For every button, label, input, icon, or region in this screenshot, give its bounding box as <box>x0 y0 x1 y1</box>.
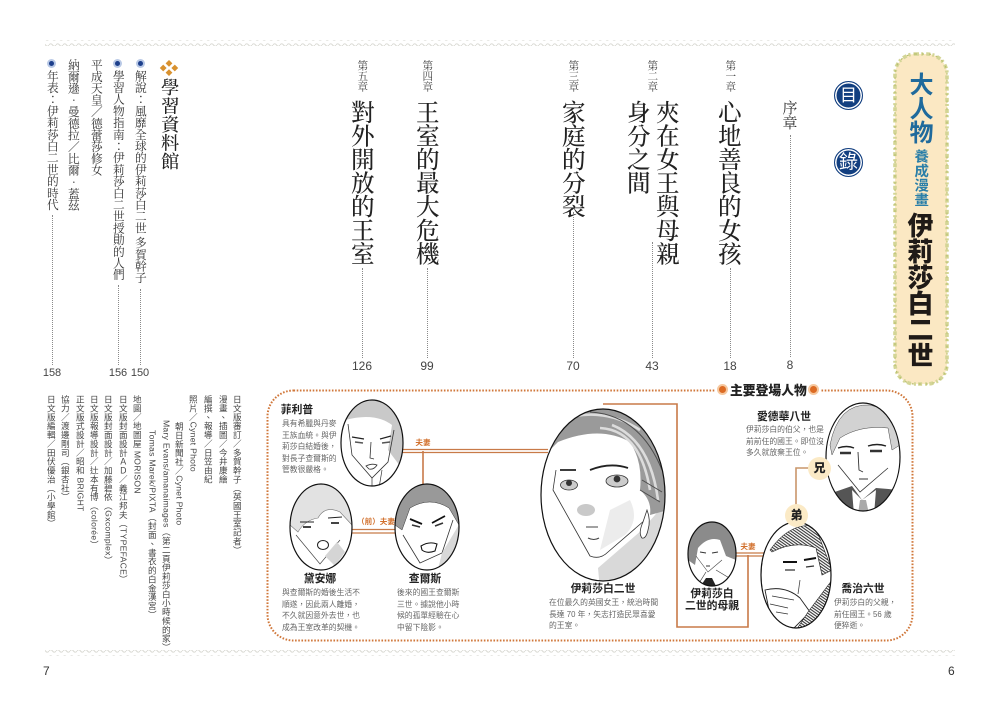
credits: 日文版報導設計／辻本有博（colorée） <box>89 395 99 549</box>
character: George VI: 喬治六世 <box>841 583 885 595</box>
character: Charles: 後來的國王查爾斯 <box>397 588 459 597</box>
page number left: 7 <box>43 664 50 678</box>
icon: contents character 目 <box>834 81 863 110</box>
credits: 地圖／地圖屋 MORISON <box>132 395 142 494</box>
character: Elizabeth II: 在位最久的英國女王，統治時間 <box>549 598 658 607</box>
character: Elizabeth's mother: 伊莉莎白 <box>690 588 734 600</box>
character: George VI: 前任國王。56 歲 <box>834 610 892 618</box>
icon: contents character 錄: 錄 <box>839 152 858 173</box>
title banner <box>893 52 949 386</box>
panel frame <box>266 390 914 642</box>
character: Edward VIII <box>746 410 824 457</box>
character: Elizabeth II: 伊莉莎白二世 <box>571 583 635 595</box>
character: Edward VIII: 前前任的國王。即位沒 <box>746 436 824 446</box>
character: Diana: 不久就因意外去世，也 <box>282 611 360 620</box>
character: Elizabeth's mother: 二世的母親 <box>685 600 739 612</box>
icon: contents character 目: 目 <box>840 86 857 105</box>
credits: 正文版式設計／昭和 BRIGHT <box>75 395 85 512</box>
portrait: Charles <box>395 484 460 570</box>
chapter 5: 126 <box>352 359 372 373</box>
icon: contents character 錄 <box>834 148 863 177</box>
people names line 1: 平成天皇／德蕾莎修女 <box>89 59 105 176</box>
character: Philip: 管教很嚴格。 <box>282 465 329 474</box>
relation label: George VI and wife: 夫妻 <box>740 542 756 551</box>
character: Diana: 順遂，因此兩人離婚， <box>282 600 360 608</box>
panel: main characters <box>266 383 914 642</box>
entry: people guide <box>109 59 127 379</box>
character: Diana: 與查爾斯的婚後生活不 <box>282 588 360 597</box>
chapter 2: 夾在女王與母親 <box>651 100 685 265</box>
character: Elizabeth II: 的王室。 <box>549 621 580 630</box>
entry: timeline: 158 <box>43 367 61 379</box>
people names line 2: 納爾遜．曼德拉／比爾．蓋茲 <box>66 59 82 211</box>
character: Philip: 王族血統。與伊 <box>282 430 337 440</box>
entry: people guide: 學習人物指南：伊莉莎白二世授勛的人們 <box>111 70 127 281</box>
chapter 3: 第三章 <box>566 60 581 92</box>
chapter 2: 43 <box>645 359 659 373</box>
panel heading: 主要登場人物 <box>730 383 807 398</box>
prologue entry: 8 <box>787 358 793 372</box>
credits: 照片／Cynet Photo <box>188 395 198 472</box>
character: Philip: 對長子查爾斯的 <box>282 454 337 462</box>
character: George VI: 伊莉莎白的父親， <box>834 598 896 607</box>
entry: commentary: 150 <box>131 367 149 379</box>
character: Philip: 菲利普 <box>281 404 313 416</box>
credits: Mary Evans/amanaimages（第二頁伊莉莎白小時候的家） <box>161 420 171 652</box>
icon: orange diamonds <box>160 60 178 76</box>
character: Edward VIII: 多久就放棄王位。 <box>746 448 808 457</box>
badge: younger brother: 弟 <box>790 508 802 522</box>
character: Charles <box>397 572 460 632</box>
character: Diana: 成為王室改革的契機。 <box>282 622 360 632</box>
entry: people guide: 156 <box>109 367 127 379</box>
chapter 2 <box>622 60 685 373</box>
chapter 1: 第一章 <box>723 60 738 92</box>
series subtitle: 養成漫畫 <box>911 149 932 207</box>
panel heading <box>715 383 821 399</box>
page number right: 6 <box>948 664 955 678</box>
portrait: Philip <box>341 400 403 488</box>
character: Philip <box>281 404 337 474</box>
relationship connectors <box>352 403 808 628</box>
entry: commentary: 解說：風靡全球的伊莉莎白二世 多賀幹子 <box>133 70 149 284</box>
credits <box>46 395 242 652</box>
portrait: Diana <box>290 484 352 570</box>
portraits <box>289 399 901 629</box>
character: Charles: 三世。據說他小時 <box>397 600 459 608</box>
series name: 大人物 <box>904 72 939 144</box>
section heading: 學習資料館 <box>157 78 183 170</box>
credits: 日文版審訂／多賀幹子（英國王室記者） <box>232 395 242 555</box>
character: Philip: 具有希臘與丹麥 <box>282 419 337 428</box>
chapter 5: 對外開放的王室 <box>346 100 380 265</box>
credits: Tomas Marek/PIXTA（封面、書衣的白金漢宮） <box>147 430 157 619</box>
chapter 2: 身分之間 <box>622 100 656 194</box>
portrait: Elizabeth's mother <box>688 520 736 590</box>
credits: 協力／渡邊剛司（銀杏社） <box>60 395 70 501</box>
character: Elizabeth's mother <box>685 588 739 612</box>
chapter 1: 18 <box>723 359 737 373</box>
portrait: Elizabeth II <box>540 400 668 590</box>
chapter 1 <box>713 60 747 373</box>
chapter 2: 第二章 <box>645 60 660 92</box>
prologue entry <box>780 100 800 372</box>
chapter 3: 家庭的分裂 <box>557 100 591 218</box>
credits: 朝日新聞社／Cynet Photo <box>174 422 184 526</box>
learning resources section <box>43 59 183 379</box>
character: Diana: 黛安娜 <box>304 573 336 585</box>
character: Edward VIII: 愛德華八世 <box>757 411 811 423</box>
chapter 5: 第五章 <box>355 60 370 92</box>
character: Diana <box>282 572 360 632</box>
credits: 日文版編輯／田伏優治（小學館） <box>46 395 56 528</box>
character: Charles: 候的孤單經驗在心 <box>397 611 459 620</box>
credits: 日文版封面設計ＡＤ／義江邦夫（TYPEFACE） <box>118 395 128 584</box>
book title: 伊莉莎白二世 <box>902 212 939 368</box>
character: Charles: 查爾斯 <box>409 573 441 585</box>
character: Philip: 莉莎白結婚後， <box>282 442 337 451</box>
badge: younger brother <box>785 504 808 527</box>
character: Elizabeth II: 長達 70 年，矢志打造民眾喜愛 <box>549 610 656 618</box>
prologue entry: 序章 <box>780 100 800 130</box>
relation label: Charles and Diana: （前）夫妻 <box>357 517 395 526</box>
credits: 日文版封面設計／加藤碧依（Gxcomplex） <box>103 395 113 565</box>
chapter 1: 心地善良的女孩 <box>713 100 747 265</box>
portrait: Edward VIII <box>826 403 900 515</box>
entry: timeline: 年表：伊莉莎白二世的時代 <box>45 70 61 210</box>
character: Edward VIII: 伊莉莎白的伯父，也是 <box>746 425 824 434</box>
badge: elder brother <box>808 457 831 480</box>
chapter 3 <box>557 60 591 373</box>
chapter 5 <box>346 60 380 373</box>
chapter 4: 王室的最大危機 <box>411 100 445 265</box>
chapter 4: 第四章 <box>420 60 435 92</box>
character: Charles: 中留下陰影。 <box>397 622 444 632</box>
badge: elder brother: 兄 <box>813 461 826 475</box>
entry: timeline <box>43 59 61 379</box>
credits: 漫畫、插圖／今井康繪 <box>218 395 228 484</box>
character: Elizabeth II <box>549 582 658 630</box>
relation label: Philip and Elizabeth: 夫妻 <box>415 438 431 447</box>
chapter 4 <box>411 60 445 373</box>
character: George VI: 便猝逝。 <box>834 621 865 630</box>
character: George VI <box>834 582 896 630</box>
chapter 3: 70 <box>566 359 580 373</box>
entry: commentary <box>131 59 149 379</box>
portrait: George VI <box>761 522 832 632</box>
chapter 4: 99 <box>420 359 434 373</box>
credits: 編撰、報導／日笠由紀 <box>203 395 213 484</box>
